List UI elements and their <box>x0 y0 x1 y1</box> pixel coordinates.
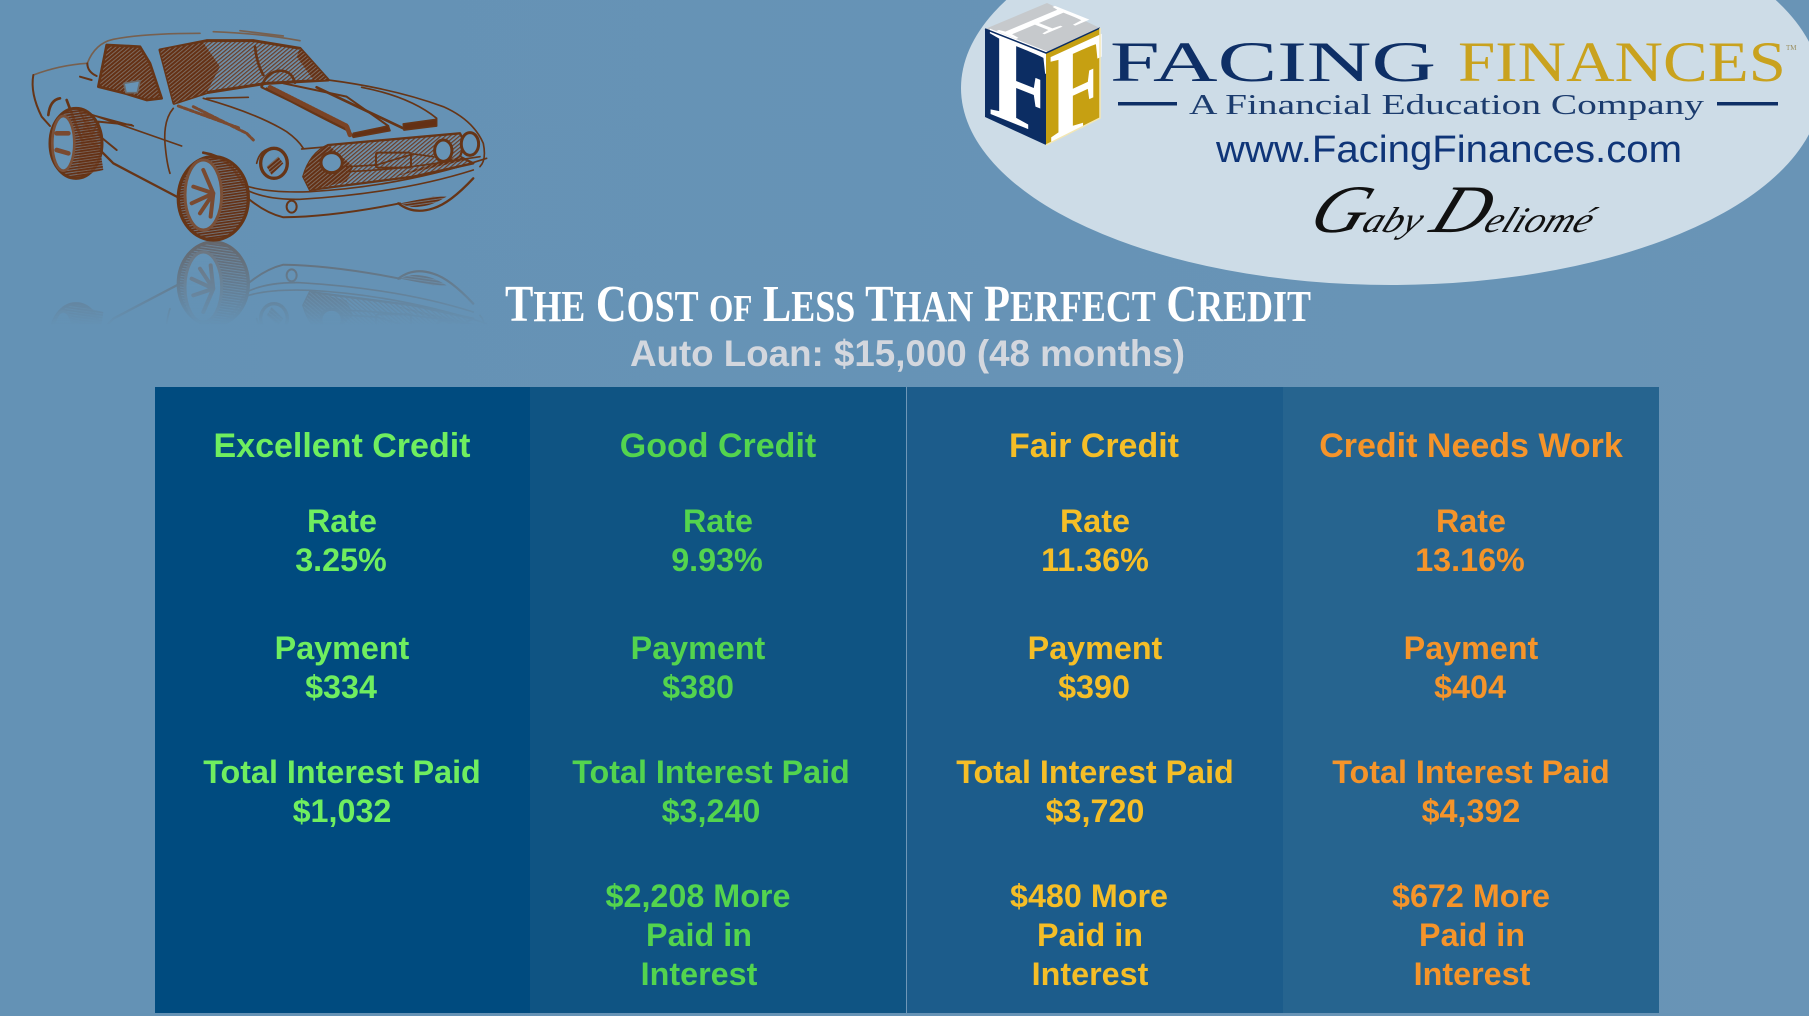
extra interest callout: Paid in <box>1419 917 1525 953</box>
payment <box>631 630 766 705</box>
rate <box>295 503 387 578</box>
logo tagline <box>1118 89 1778 121</box>
extra interest callout: $2,208 More <box>606 878 790 914</box>
total interest paid: $4,392 <box>1422 793 1520 829</box>
total interest paid <box>1332 754 1610 829</box>
extra interest callout: Paid in <box>1037 917 1143 953</box>
subtitle: Auto Loan: $15,000 (48 months) <box>630 333 1185 374</box>
extra interest callout: Paid in <box>646 917 752 953</box>
heading: fair credit: Fair Credit <box>1009 427 1179 465</box>
rate <box>671 503 763 578</box>
website url: www.FacingFinances.com <box>1215 129 1682 171</box>
payment: Payment <box>1028 630 1163 666</box>
logo ellipse panel <box>961 0 1809 285</box>
extra interest callout: Interest <box>641 956 758 992</box>
rate <box>1415 503 1525 578</box>
total interest paid <box>203 754 481 829</box>
icon: FF logo cube <box>974 0 1113 172</box>
car sketch illustration <box>33 31 487 240</box>
total interest paid: $3,720 <box>1046 793 1144 829</box>
rate: 9.93% <box>671 542 763 578</box>
panel: excellent credit column <box>155 387 530 1013</box>
payment <box>1404 630 1539 705</box>
extra interest callout: $480 More <box>1010 878 1168 914</box>
car reflection <box>55 241 481 316</box>
rate: 11.36% <box>1041 542 1149 578</box>
total interest paid: Total Interest Paid <box>203 754 481 790</box>
panel: credit needs work column <box>1283 387 1659 1013</box>
rate: Rate <box>307 503 377 539</box>
total interest paid: Total Interest Paid <box>572 754 850 790</box>
payment: $390 <box>1058 669 1130 705</box>
payment <box>1028 630 1163 705</box>
rate: 13.16% <box>1415 542 1525 578</box>
extra interest callout <box>1010 878 1168 992</box>
extra interest callout <box>606 878 790 992</box>
logo wordmark <box>1110 31 1797 94</box>
signature: Gaby Deliomé <box>1300 172 1614 247</box>
rate: Rate <box>1060 503 1130 539</box>
total interest paid: Total Interest Paid <box>1332 754 1610 790</box>
payment: $404 <box>1434 669 1506 705</box>
total interest paid <box>956 754 1234 829</box>
logo wordmark: FACING <box>1110 31 1436 94</box>
total interest paid: Total Interest Paid <box>956 754 1234 790</box>
icon: FF logo cube: F <box>1049 3 1106 172</box>
title: THE COST OF LESS THAN PERFECT CREDIT <box>505 276 1311 333</box>
logo wordmark: FINANCES <box>1458 31 1786 94</box>
rate <box>1041 503 1149 578</box>
payment: $380 <box>662 669 734 705</box>
extra interest callout: $672 More <box>1392 878 1550 914</box>
panel: fair credit column <box>906 387 1283 1013</box>
logo wordmark: TM <box>1786 44 1797 52</box>
total interest paid: $1,032 <box>293 793 391 829</box>
payment: Payment <box>631 630 766 666</box>
heading: good credit: Good Credit <box>620 427 816 465</box>
rate: 3.25% <box>295 542 387 578</box>
icon: FF logo cube: F <box>988 0 1055 168</box>
heading: excellent credit: Excellent Credit <box>214 427 470 465</box>
extra interest callout <box>1392 878 1550 992</box>
heading: credit needs work: Credit Needs Work <box>1319 427 1623 465</box>
rate: Rate <box>1436 503 1506 539</box>
total interest paid <box>572 754 850 829</box>
rate: Rate <box>683 503 753 539</box>
logo tagline: A Financial Education Company <box>1189 89 1705 121</box>
payment: $334 <box>305 669 377 705</box>
payment <box>275 630 410 705</box>
extra interest callout: Interest <box>1032 956 1149 992</box>
total interest paid: $3,240 <box>662 793 760 829</box>
extra interest callout: Interest <box>1414 956 1531 992</box>
payment: Payment <box>275 630 410 666</box>
payment: Payment <box>1404 630 1539 666</box>
panel: good credit column <box>530 387 906 1013</box>
